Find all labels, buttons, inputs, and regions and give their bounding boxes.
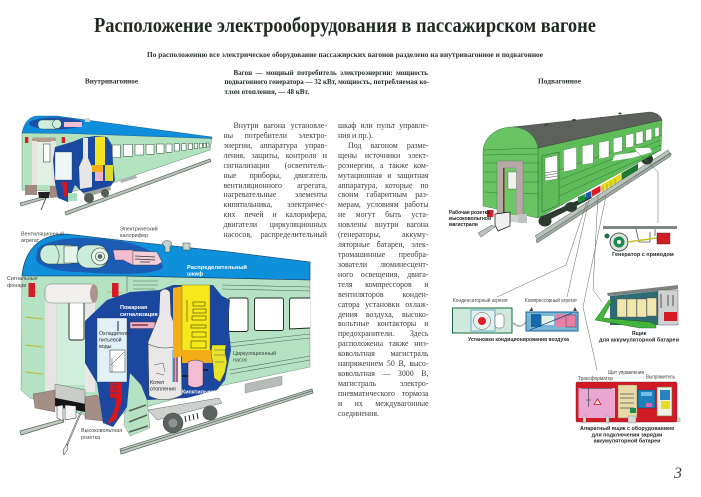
text column 2 [338,121,428,418]
text column 2: новлены внутри вагона [338,220,428,229]
transformer label: Трансформатор [578,376,613,382]
wagon line work [483,135,662,196]
distribution cabinet [173,285,213,363]
battery box [595,285,679,344]
fire alarm: сигнализация [120,312,158,318]
small car door [25,137,65,210]
battery box roof [607,285,678,296]
large car side lines [127,276,310,374]
heading: inside the car: Внутривагонное [85,78,138,86]
text column 2: дения воздуха, высоко- [338,310,428,319]
car labels: фонари [7,283,26,289]
title: Расположение электрооборудования в пассажирском вагоне [94,13,596,37]
air conditioning units [452,297,578,343]
text column 1: ны потребители электро- [224,131,327,140]
large car body [21,275,310,420]
drinking water cooler: Охладитель [99,331,129,337]
car labels: Вентиляционный [21,230,64,238]
car labels: Циркуляционный [233,350,276,357]
generator caption: Генератор с приводом [612,252,674,258]
text column 2: ковольтная магистраль [338,349,428,358]
text column 2: вентиляторов конден- [338,290,428,299]
text column 2: (генераторы, аккуму- [338,230,428,239]
text column 2: и их междувагонные [338,399,428,408]
apparatus feet [583,416,680,423]
ventilation unit [40,245,108,268]
car labels: калорифер [120,233,148,239]
mint steps [124,373,150,436]
small cutaway car [20,116,212,215]
drinking water cooler [97,318,129,382]
door opening [45,284,98,412]
white highlight [612,148,652,161]
text column 2: расположены также низ- [338,339,428,348]
car labels: Высоковольтная [81,428,122,434]
compressor label: Компрессорный агрегат [525,297,578,304]
signal lamps [28,283,122,297]
text column 2: магистраль электро- [338,379,428,388]
fire alarm [120,305,158,328]
text column 2: Под вагоном разме- [348,141,428,150]
bold intro paragraph: Вагон — мощный потребитель электроэнергии: мощность [234,69,428,77]
drinking water cooler: питьевой [99,336,122,344]
battery cells [617,298,656,317]
wagon side [538,120,662,218]
text column 2: ляторные батареи, элек- [338,240,428,249]
large car rails [20,389,313,454]
undercar wagon [478,112,671,243]
text column 1: двигатели циркуляционных [224,220,327,229]
small car interior equipment [55,137,113,197]
heating boiler: Котел [150,380,164,386]
apparatus box [576,370,680,444]
small car roof [22,116,212,138]
large cutaway car [7,226,313,455]
text column 2: вольтные контакторы и [338,319,428,328]
large car roof [22,234,310,280]
control panel label: Щит управления [608,370,644,376]
socket label: Рабочая розетка [449,209,490,216]
page number: 3 [673,465,682,482]
subtitle: По расположению все электрическое оборудование пассажирских вагонов разделено на внутривагонное и подвагонное [147,51,543,59]
battery caption: для аккумуляторной батареи [599,336,679,344]
text column 2: теля компрессоров и [338,280,428,289]
connecting pipe [512,322,526,326]
socket label: высоковольтной [449,215,491,222]
car labels: Сигнальные [7,276,38,282]
text column 2: аппаратура, которые по [338,181,428,190]
bold intro paragraph: подвагонного генератора — 32 кВт, мощность, потребляемая ко- [224,78,429,86]
battery lid [595,300,656,328]
small car body [22,132,212,192]
high-voltage socket [57,405,81,455]
small car roof equipment [29,118,90,130]
control panel compartment [618,385,637,418]
converter compartment [638,390,655,408]
car labels: насос [233,358,248,364]
small car windows [112,143,209,158]
car labels: розетка [81,435,100,441]
large car skirt [245,376,282,393]
text column 1: ные приборы, двигатель [224,171,327,180]
heating boiler [148,289,182,400]
text column 1: ления, защиты, контроля и [224,151,327,160]
text column 1: Внутри вагона установле- [234,121,327,130]
wagon roof [513,112,662,148]
rectifier compartment [657,387,672,416]
distribution cabinet label: Распределительный [187,264,247,271]
condenser unit [452,308,512,333]
car labels: Электрический [120,226,158,232]
text column 1: ких печей и калорифера, [224,210,327,219]
text column 2: предохранители. Здесь [338,329,428,338]
distribution cabinet label: шкаф [187,270,203,278]
text column 2: зователи люминесцент- [338,260,428,269]
air conditioning caption: Установки кондиционирования воздуха [468,337,570,343]
text column 2: пневматического тормоза [338,389,428,398]
wagon end face [483,127,538,218]
electric air heater [113,250,162,265]
generator red box [657,233,670,244]
heading: under the car: Подвагонное [538,78,581,86]
apparatus red housing [576,382,677,422]
rectifier label: Выпрямитель [646,374,675,380]
roof ventilators [544,112,622,126]
boiler label: Кипятильник [182,390,217,396]
text column 2: не могут быть уста- [338,210,428,219]
small car cutaway blob [53,136,115,202]
generator wheel [604,233,628,251]
text column 2: ного освещения, двига- [338,270,428,279]
door step blocks [33,390,103,421]
wagon door frame [497,161,527,222]
main cutaway blob [85,285,231,427]
battery housing [610,291,658,325]
text column 1: вентиляционного агрегата, [224,181,327,190]
wagon rear lamp and coupler [487,210,527,231]
battery caption: Ящик [632,331,647,337]
olive side bars [25,317,43,374]
apparatus caption: для подключения зарядки [592,432,662,438]
drinking water cooler: воды [99,344,112,350]
text column 1 [224,121,327,239]
small car rails [20,159,211,215]
small car bogie [68,175,137,203]
wagon windows [564,127,659,172]
battery side panel [658,290,678,325]
car labels [7,226,276,441]
text column 2: тромашинные преобра- [338,250,428,259]
text column 1: насосов, распределительный [224,230,327,239]
text column 1: энергии, аппаратура управ- [224,141,327,150]
bold intro paragraph: тлом отопления, — 48 кВт. [224,88,309,96]
red hose [107,382,122,424]
text column 1: сигнализации (осветитель- [224,161,327,170]
bold intro paragraph [224,69,429,96]
wagon bogies and undergear [538,154,653,226]
car labels: агрегат [21,238,40,244]
text column 1: нагревательные элементы [224,190,327,199]
roof cutaway patch [36,238,163,274]
generator with drive [603,226,677,258]
transformer compartment [578,388,615,418]
text column 2: напряжением 50 В, высо- [338,359,428,368]
apparatus caption: аккумуляторной батареи [594,438,660,444]
text column 2: мутационная и защитная [338,171,428,180]
text column 2: ния и пр.). [338,131,373,140]
text column 2: мерам, условиям работы [338,200,428,209]
heating boiler: отопления [150,386,176,392]
wagon side door [542,152,559,212]
condenser label: Конденсаторный агрегат [453,297,509,304]
text column 2: шкаф или пульт управле- [338,121,428,130]
text column 1: кипятильника, электричес- [224,200,327,209]
generator drive shaft [628,238,657,242]
fire alarm: Пожарная [120,305,147,311]
wagon rails [478,150,671,243]
large car windows [228,298,310,332]
underfloor equipment band [578,164,638,203]
boiler tank and pump [182,345,227,388]
compressor unit [526,307,578,331]
text column 2: соединения. [338,409,379,418]
socket label: магистрали [449,222,478,228]
apparatus caption: Апаратный ящик с оборудованием [580,425,674,432]
text column 2: своим габаритным раз- [338,190,428,199]
large car bogie [148,398,222,433]
generator frame [603,226,677,229]
leader lines [497,152,658,370]
text column 2: щены источники элект- [338,151,428,160]
roof vents [162,240,190,252]
text column 2: сатора установки охлаж- [338,300,428,309]
text column 2: ковольтная — 3000 В, [338,369,428,378]
text column 2: роэнергии, а также ком- [338,161,428,170]
